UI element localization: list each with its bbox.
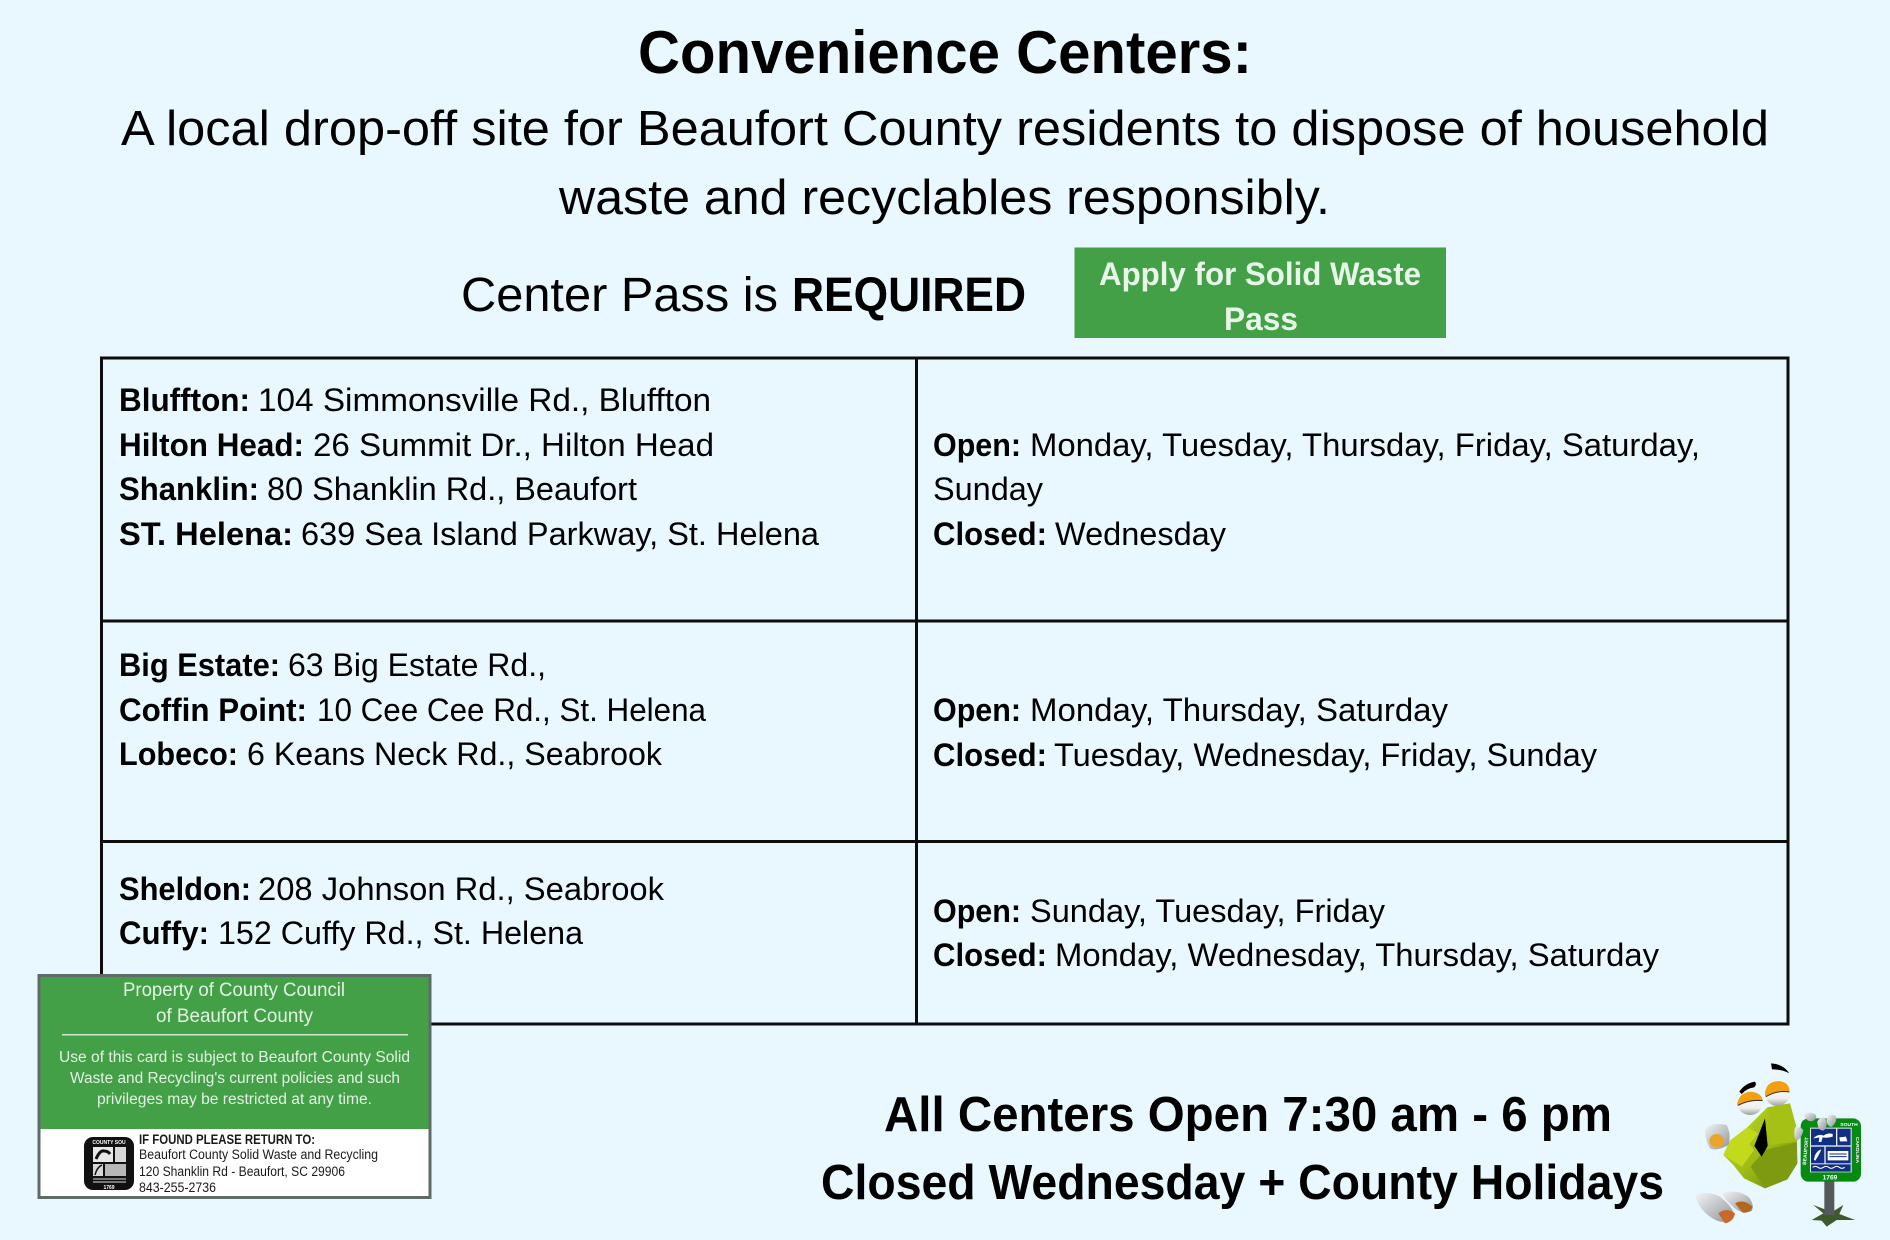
row 3 schedule: Sunday, Tuesday, Friday [1030, 893, 1385, 929]
shoes [1695, 1193, 1734, 1222]
card heading: of Beaufort County [156, 1005, 313, 1027]
row 3 schedule: Closed: [933, 937, 1047, 973]
card policy text: privileges may be restricted at any time. [97, 1091, 372, 1108]
row 1 schedule: Open: [933, 427, 1021, 463]
card return address: 120 Shanklin Rd - Beaufort, SC 29906 [139, 1164, 345, 1179]
card return address [139, 1132, 378, 1195]
card return address: IF FOUND PLEASE RETURN TO: [139, 1132, 315, 1147]
icon: county seal: COUNTY SOU [92, 1140, 126, 1146]
icon: recycling mascot holding county sign: BEAUFORT [1802, 1137, 1810, 1165]
row 1 schedule: Monday, Tuesday, Thursday, Friday, Saturday, [1030, 427, 1700, 463]
row 2 addresses: 10 Cee Cee Rd., St. Helena [317, 692, 706, 728]
row 3 addresses: Sheldon: [119, 871, 251, 907]
subtitle text block: waste and recyclables responsibly. [558, 171, 1330, 225]
card policy text [59, 1049, 410, 1108]
hours text block: All Centers Open 7:30 am - 6 pm [884, 1088, 1612, 1142]
grass [1812, 1204, 1855, 1227]
mascot body [1723, 1103, 1797, 1188]
card heading: Property of County Council [123, 979, 345, 1001]
icon: recycling mascot holding county sign: SOUTH [1840, 1122, 1858, 1128]
row 3 schedule: Open: [933, 893, 1021, 929]
subtitle text block: A local drop-off site for Beaufort County residents to dispose of household [121, 102, 1769, 156]
button: apply for solid waste pass [1074, 248, 1446, 338]
row 3 addresses: Cuffy: [119, 915, 209, 951]
eyes [1765, 1081, 1790, 1106]
row 2 addresses: Coffin Point: [119, 692, 307, 728]
row 1 addresses [119, 382, 819, 552]
row 1 schedule: Closed: [933, 516, 1047, 552]
center pass required statement: REQUIRED [792, 269, 1026, 322]
mouth [1754, 1118, 1768, 1157]
hours text block [821, 1088, 1664, 1210]
title: Convenience Centers: [638, 19, 1252, 86]
row 1 addresses: Bluffton: [119, 382, 250, 418]
row 2 schedule [933, 692, 1597, 773]
row 1 schedule [933, 427, 1700, 552]
card policy text: Waste and Recycling's current policies and such [70, 1070, 400, 1087]
row 3 schedule [933, 893, 1659, 973]
row 2 schedule: Tuesday, Wednesday, Friday, Sunday [1054, 737, 1597, 773]
row 1 addresses: 639 Sea Island Parkway, St. Helena [301, 516, 819, 552]
row 1 addresses: Hilton Head: [119, 427, 304, 463]
row 1 addresses: Shanklin: [119, 471, 259, 507]
card return address: 843-255-2736 [139, 1180, 216, 1195]
button: apply for solid waste pass: Apply for Solid Waste [1099, 256, 1421, 292]
icon: county seal: 1769 [103, 1185, 115, 1191]
row 1 addresses: 104 Simmonsville Rd., Bluffton [258, 382, 711, 418]
row 2 addresses: 6 Keans Neck Rd., Seabrook [247, 736, 663, 772]
right hand fingers [1794, 1127, 1803, 1141]
row 2 schedule: Open: [933, 692, 1021, 728]
sign [1801, 1118, 1861, 1182]
subtitle text block [121, 102, 1769, 225]
center pass required statement: Center Pass is [461, 269, 778, 322]
row 1 addresses: ST. Helena: [119, 516, 293, 552]
icon: recycling mascot holding county sign: 1769 [1823, 1174, 1838, 1181]
row 2 addresses: Lobeco: [119, 736, 238, 772]
row 1 schedule: Wednesday [1055, 516, 1226, 552]
icon: county seal [84, 1137, 134, 1191]
card heading [123, 979, 345, 1027]
hours text block: Closed Wednesday + County Holidays [821, 1156, 1664, 1210]
row 2 addresses: 63 Big Estate Rd., [288, 647, 546, 683]
left hand [1705, 1124, 1730, 1149]
icon: recycling mascot holding county sign [1695, 1063, 1861, 1227]
row 3 addresses: 208 Johnson Rd., Seabrook [258, 871, 665, 907]
row 2 schedule: Monday, Thursday, Saturday [1030, 692, 1448, 728]
table: centers and schedules [101, 358, 1788, 1024]
card policy text: Use of this card is subject to Beaufort County Solid [59, 1049, 410, 1066]
post [1824, 1180, 1834, 1215]
row 2 addresses: Big Estate: [119, 647, 280, 683]
row 3 addresses [119, 871, 665, 951]
card return address: Beaufort County Solid Waste and Recycling [139, 1147, 378, 1162]
sample center pass card [39, 976, 430, 1198]
button: apply for solid waste pass: Pass [1224, 301, 1298, 337]
icon: recycling mascot holding county sign: CAROLINA [1854, 1137, 1860, 1164]
row 1 addresses: 26 Summit Dr., Hilton Head [313, 427, 714, 463]
row 2 addresses [119, 647, 706, 772]
row 3 addresses: 152 Cuffy Rd., St. Helena [218, 915, 583, 951]
eyebrows [1739, 1082, 1756, 1094]
row 1 addresses: 80 Shanklin Rd., Beaufort [267, 471, 637, 507]
row 3 schedule: Monday, Wednesday, Thursday, Saturday [1055, 937, 1659, 973]
row 1 schedule: Sunday [933, 471, 1043, 507]
row 2 schedule: Closed: [933, 737, 1047, 773]
center pass required statement [461, 269, 1026, 322]
